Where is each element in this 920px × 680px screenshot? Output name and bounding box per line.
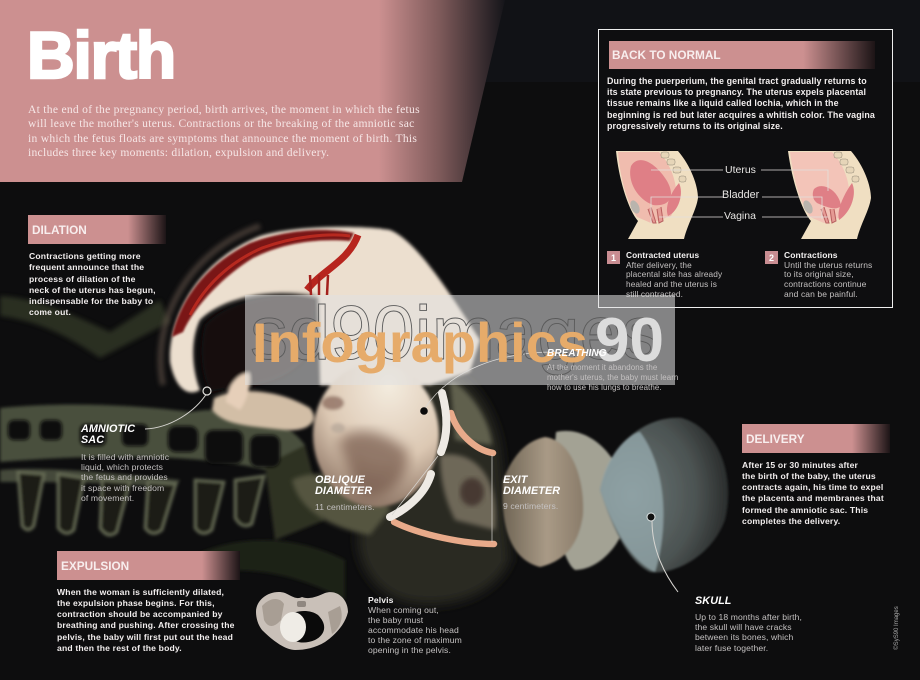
oblique diameter heading: OBLIQUE xyxy=(315,474,365,486)
header panel xyxy=(0,0,505,182)
upper faint bones xyxy=(0,296,170,358)
amniotic sac heading: AMNIOTIC xyxy=(81,423,135,435)
skull text: the skull will have cracks xyxy=(695,622,792,632)
pelvis text xyxy=(368,595,462,655)
spine bones xyxy=(0,405,345,600)
step 2 text: Until the uterus returns xyxy=(784,260,872,270)
exit diameter arcs xyxy=(394,413,494,544)
back to normal text: beginning is red but later acquires a whitish color. The vagina xyxy=(607,110,875,120)
oblique diameter value: 11 centimeters. xyxy=(315,502,375,512)
step 1 text: healed and the uterus is xyxy=(626,279,717,289)
skull leader xyxy=(652,521,678,592)
green tissue behind head xyxy=(292,365,510,604)
step 2 text: contractions continue xyxy=(784,279,866,289)
pelvis illustration xyxy=(256,592,348,650)
dark vertebra gaps xyxy=(8,420,280,467)
skull text: later fuse together. xyxy=(695,643,768,653)
exit diameter heading: DIAMETER xyxy=(503,485,560,497)
heading: delivery: DELIVERY xyxy=(746,432,805,446)
placenta strip xyxy=(172,230,358,337)
expulsion text xyxy=(57,586,235,653)
skull callout xyxy=(695,595,802,653)
dilation text: process of dilation of the xyxy=(29,274,136,284)
panel: delivery xyxy=(742,424,890,526)
diagram leader lines xyxy=(651,170,828,223)
breathing callout xyxy=(547,348,678,392)
breathing text xyxy=(547,363,678,392)
step 1 text: After delivery, the xyxy=(626,260,692,270)
dilation text: come out. xyxy=(29,307,71,317)
credit: ©SyS90 Images xyxy=(894,606,900,650)
skull heading: SKULL xyxy=(695,595,732,607)
heading: expulsion xyxy=(57,551,240,580)
numeral 2: 2 xyxy=(769,253,774,263)
amniotic sac text: It is filled with amniotic xyxy=(81,452,169,462)
pelvis text: Pelvis xyxy=(368,595,393,605)
amniotic sac marker xyxy=(203,387,211,395)
amniotic sac text: it space with freedom xyxy=(81,483,164,493)
amniotic sac heading xyxy=(80,423,136,446)
step 2 text: to its original size, xyxy=(784,269,854,279)
top background band xyxy=(0,0,920,82)
breathing marker xyxy=(420,407,428,415)
step 1 text: placental site has already xyxy=(626,269,722,279)
expulsion text: contraction should be accompanied by xyxy=(57,609,223,619)
diagram: uterus comparison xyxy=(616,151,871,239)
expulsion text: When the woman is sufficiently dilated, xyxy=(57,586,224,596)
heading: delivery xyxy=(742,424,890,453)
amniotic sac text: of movement. xyxy=(81,493,134,503)
pelvis text: When coming out, xyxy=(368,605,439,615)
pelvis text: opening in the pelvis. xyxy=(368,645,451,655)
delivery text: completes the delivery. xyxy=(742,516,840,526)
heading: back to normal: BACK TO NORMAL xyxy=(612,48,721,62)
watermark orange text: Infographics xyxy=(252,310,588,374)
exit diameter value: 9 centimeters. xyxy=(503,501,558,511)
intro text: At the end of the pregnancy period, birth arrives, the moment in which the fetus xyxy=(28,103,420,116)
pelvis text: the baby must xyxy=(368,615,423,625)
skull text xyxy=(695,612,802,653)
expulsion text: the expulsion phase begins. For this, xyxy=(57,598,215,608)
dilation text: Contractions getting more xyxy=(29,251,141,261)
pelvis text: to the zone of maximum xyxy=(368,635,462,645)
numeral 2 xyxy=(765,251,778,264)
expulsion text: and then the rest of the body. xyxy=(57,643,182,653)
watermark numeral: 90 xyxy=(595,306,664,375)
dilation text: indispensable for the baby to xyxy=(29,296,153,306)
heading: dilation xyxy=(28,215,166,244)
oblique diameter callout xyxy=(315,474,375,512)
panel: dilation xyxy=(28,215,166,317)
back to normal text: During the puerperium, the genital tract gradually returns to xyxy=(607,76,867,86)
expulsion text: pelvis, the baby will first put out the head xyxy=(57,632,233,642)
oblique diameter arcs xyxy=(390,393,446,517)
back to normal text: its state previous to pregnancy. The uterus expels placental xyxy=(607,87,866,97)
delivery text: formed the amniotic sac. This xyxy=(742,505,868,515)
breathing heading: BREATHING xyxy=(547,348,607,359)
oblique diameter heading xyxy=(315,474,372,497)
step 2 text xyxy=(784,250,872,299)
amniotic sac text xyxy=(81,452,169,503)
watermark xyxy=(245,295,675,385)
step 1 text xyxy=(626,250,722,299)
exit diameter heading xyxy=(503,474,560,497)
amniotic sac text: liquid, which protects xyxy=(81,462,163,472)
heading: expulsion: EXPULSION xyxy=(61,559,129,573)
skull stages xyxy=(503,418,728,572)
pelvis text: accommodate his head xyxy=(368,625,459,635)
intro text: includes three key moments: dilation, expulsion and delivery. xyxy=(28,146,329,159)
numeral 1: 1 xyxy=(611,253,616,263)
diagram: contractions xyxy=(788,151,871,239)
delivery text: the birth of the baby, the uterus xyxy=(742,471,876,481)
breathing text: At the moment it abandons the xyxy=(547,363,657,372)
dilation text xyxy=(29,251,156,317)
amniotic sac callout xyxy=(80,423,169,503)
step 2 text: and can be painful. xyxy=(784,289,858,299)
panel: expulsion xyxy=(57,551,240,653)
step 2 text: Contractions xyxy=(784,250,838,260)
dilation text: frequent announce that the xyxy=(29,262,144,272)
heading: dilation: DILATION xyxy=(32,223,87,237)
heading: back to normal xyxy=(609,41,875,69)
delivery text: the placenta and membranes that xyxy=(742,493,884,503)
fetus body xyxy=(170,227,480,507)
step 1 text: still contracted. xyxy=(626,289,683,299)
breathing text: mother's uterus, the baby must learn xyxy=(547,373,678,382)
expulsion text: breathing and pushing. After crossing the xyxy=(57,620,235,630)
title: Birth xyxy=(27,18,175,92)
delivery text: contracts again, his time to expel xyxy=(742,482,883,492)
skull marker xyxy=(647,513,655,521)
oblique diameter heading: DIAMETER xyxy=(315,485,372,497)
numeral 1 xyxy=(607,251,620,264)
delivery text xyxy=(742,460,884,526)
amniotic sac leader xyxy=(145,393,207,429)
amniotic sac heading: SAC xyxy=(81,434,104,446)
delivery text: After 15 or 30 minutes after xyxy=(742,460,858,470)
intro text: in which the fetus floats are symptoms that announce the moment of birth. This xyxy=(28,132,417,145)
intro text xyxy=(28,103,420,159)
amniotic sac halo xyxy=(161,226,260,385)
panel: back to normal xyxy=(598,29,893,308)
step 1 text: Contracted uterus xyxy=(626,250,699,260)
diagram: contracted uterus xyxy=(616,151,698,239)
guide lines xyxy=(392,352,555,542)
intro text: will leave the mother's uterus. Contractions or the breaking of the amniotic sac xyxy=(28,117,415,130)
back to normal text: progressively returns to its original size. xyxy=(607,121,783,131)
label: uterus: Uterus xyxy=(725,164,756,176)
back to normal text: tissue remains like a liquid called lochia, which in the xyxy=(607,98,839,108)
exit diameter heading: EXIT xyxy=(503,474,527,486)
back to normal text xyxy=(607,76,875,131)
breathing text: how to use his lungs to breathe. xyxy=(547,383,662,392)
skull text: Up to 18 months after birth, xyxy=(695,612,802,622)
skull text: between its bones, which xyxy=(695,632,793,642)
exit diameter callout xyxy=(503,474,560,511)
dilation text: neck of the uterus has begun, xyxy=(29,285,156,295)
label: vagina: Vagina xyxy=(724,210,756,222)
amniotic sac text: the fetus and provides xyxy=(81,472,168,482)
label: bladder: Bladder xyxy=(722,189,759,201)
